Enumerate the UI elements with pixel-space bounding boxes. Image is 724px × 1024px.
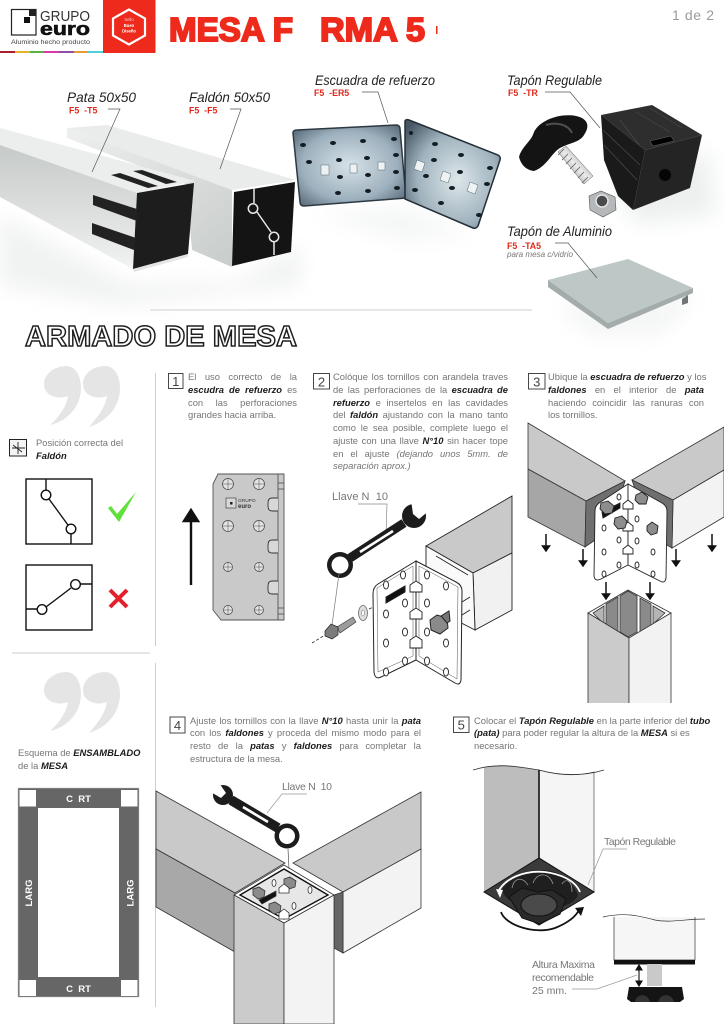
text: esquema de ensamblado xyxy=(18,747,140,771)
label: tapón regulable step 5: Tapón Regulable xyxy=(604,836,676,848)
product codes: F5 -TR xyxy=(508,88,538,98)
bracket plate: euro xyxy=(238,504,251,510)
product labels: Faldón 50x50 xyxy=(189,89,270,105)
product codes xyxy=(69,88,541,251)
logo: Grupo Euro: Aluminio hecho producto xyxy=(11,39,90,46)
illustration: bolt and washer xyxy=(312,574,410,648)
text: step 5: necesario. xyxy=(474,740,517,751)
badge: Sello Buen Diseño: Buen xyxy=(124,23,135,28)
arrow up xyxy=(184,510,198,585)
product soft shadows xyxy=(0,150,716,335)
dividers xyxy=(12,373,156,1007)
quote mark 2 xyxy=(44,672,120,733)
text: step 5 xyxy=(474,714,710,751)
icon: check mark xyxy=(108,492,136,522)
text: step 2: refuerzo e insertelos en las cavidades xyxy=(333,396,508,408)
product labels: Tapón Regulable xyxy=(507,72,602,88)
text: step 1 xyxy=(188,371,297,420)
text: step 4: Ajuste los tornillos con la llave N°10 hasta unir la pata xyxy=(190,714,421,726)
step 3 number xyxy=(528,374,545,390)
icon: faldón position xyxy=(10,440,26,456)
step 4 number xyxy=(170,717,185,733)
text: step 2: en el ajuste (dejando unos 5mm. de xyxy=(333,448,508,458)
step 5 number xyxy=(454,717,469,732)
label: tapón regulable step 5 xyxy=(588,836,676,885)
product codes: F5 -F5 xyxy=(189,106,217,116)
bracket plate: GRUPO xyxy=(238,498,256,504)
illustration: bracket step 2 xyxy=(373,561,462,684)
text: step 2: Colóque los tornillos con arandela traves xyxy=(333,371,508,382)
illustration: leveler height detail xyxy=(603,915,705,1002)
step 2 number xyxy=(314,374,330,390)
label: llave step 2: Llave N 10 xyxy=(332,491,388,503)
text: faldón position: Faldón xyxy=(36,450,67,461)
heading: armado de mesa: ARMADO DE MESA xyxy=(25,321,297,353)
product: Tapón de Aluminio xyxy=(548,259,693,329)
text: step 5: (pata) para poder regular la altura de la MESA si es xyxy=(474,727,690,738)
label: llave step 4: Llave N 10 xyxy=(282,781,332,793)
text: step 2: del faldón ajustando con la mano tanto xyxy=(333,409,508,420)
text: step 3: Ubique la escuadra de refuerzo y los xyxy=(548,371,706,382)
step 5 number: 5 xyxy=(458,718,465,732)
product labels: para mesa c/vidrio xyxy=(506,250,574,259)
product labels xyxy=(67,72,612,259)
text: esquema de ensamblado: Esquema de ENSAMBLADO xyxy=(18,747,140,758)
text: step 2: como le sea posible, complete luego el xyxy=(333,422,508,433)
step 1 number: 1 xyxy=(172,374,179,389)
diagram: table frame: LARG xyxy=(126,880,136,906)
label: altura máxima: recomendable xyxy=(532,972,594,984)
logo: Grupo Euro: GRUPO xyxy=(40,8,90,25)
badge: Sello Buen Diseño xyxy=(103,0,156,53)
label: altura máxima: Altura Maxima xyxy=(532,959,595,971)
diagram: correct position xyxy=(26,479,92,544)
illustration: bracket step 3 xyxy=(594,484,667,582)
product labels: Tapón de Aluminio xyxy=(507,223,612,239)
product codes: F5 -ER5 xyxy=(314,88,349,98)
product codes: F5 -T5 xyxy=(69,106,97,116)
text: step 2 xyxy=(333,371,508,471)
illustration: left tube step 3 xyxy=(528,423,625,547)
product labels: Escuadra de refuerzo xyxy=(315,72,435,88)
text: step 1: grandes hacia arriba. xyxy=(188,409,276,420)
illustration: right tube step 3 xyxy=(632,427,724,548)
text: step 3 xyxy=(548,371,706,420)
text: step 4: estructura de la mesa. xyxy=(190,753,283,764)
illustration: wrench step 4 xyxy=(209,780,300,869)
title: MESA F xyxy=(169,11,293,48)
label: altura máxima xyxy=(532,959,637,997)
text: step 4: con los faldones y proceda del mismo modo para el xyxy=(190,727,421,738)
text: step 1: con las perforaciones xyxy=(188,396,297,408)
label: llave step 2 xyxy=(332,491,388,535)
text: step 2: ajuste con una llave N°10 sin hacer tope xyxy=(333,435,508,446)
step 3 number: 3 xyxy=(533,374,540,390)
bracket plate xyxy=(213,474,284,620)
text: step 2: separación aprox.) xyxy=(333,460,411,471)
text: step 3: los tornillos. xyxy=(548,409,598,420)
step 4 number: 4 xyxy=(174,718,181,733)
divider xyxy=(150,309,532,311)
title xyxy=(169,11,438,48)
step 2 number: 2 xyxy=(318,374,325,390)
product: Faldón 50x50 xyxy=(67,125,296,267)
illustration: wrench step 2 xyxy=(327,500,431,578)
arrows down step 3 xyxy=(542,534,716,599)
text: step 5: Colocar el Tapón Regulable en la parte inferior del tubo xyxy=(474,714,710,726)
color strip xyxy=(0,51,103,53)
product labels: Pata 50x50 xyxy=(67,89,136,105)
diagram: incorrect position xyxy=(26,565,92,630)
illustration: assembled corner xyxy=(156,791,421,1024)
diagram: table frame: LARG xyxy=(24,880,35,906)
diagram: table frame: C RT xyxy=(66,794,91,805)
product codes: F5 -TA5 xyxy=(507,241,541,251)
text: step 1: El uso correcto de la xyxy=(188,371,297,382)
badge: Sello Buen Diseño: Diseño xyxy=(122,28,136,34)
icon: red cross xyxy=(110,590,127,607)
illustration: tube step 2 xyxy=(426,496,512,630)
product: Pata 50x50 xyxy=(0,128,195,272)
label: altura máxima: 25 mm. xyxy=(532,985,567,997)
illustration: post step 3 xyxy=(588,590,671,703)
product: Tapón Regulable xyxy=(519,105,702,217)
text: step 2: de las perforaciones de la escuadra de xyxy=(333,384,508,395)
text: step 3: faldones en el interior de pata xyxy=(548,384,704,395)
diagram: table frame: C RT xyxy=(66,984,91,995)
logo: Grupo Euro xyxy=(11,8,90,46)
product leader lines xyxy=(92,92,600,278)
badge: Sello Buen Diseño: Sello xyxy=(124,17,134,22)
illustration: leg with leveler xyxy=(473,765,604,930)
logo: Grupo Euro: euro xyxy=(40,19,90,39)
text: step 4 xyxy=(190,714,421,764)
title: RMA 5 xyxy=(320,11,425,48)
text: esquema de ensamblado: de la MESA xyxy=(18,760,68,771)
text: faldón position xyxy=(36,437,123,461)
quote mark 1 xyxy=(44,366,120,427)
product: Escuadra de refuerzo xyxy=(293,120,500,228)
diagram: table frame xyxy=(18,788,139,997)
label: llave step 4 xyxy=(267,781,332,813)
text: step 4: resto de la patas y faldones para completar la xyxy=(190,740,421,751)
page number: 1 de 2 xyxy=(672,7,714,23)
text: step 1: escudra de refuerzo es xyxy=(188,384,297,395)
text: faldón position: Posición correcta del xyxy=(36,437,123,448)
step 1 number xyxy=(168,374,183,389)
text: step 3: haciendo coincidir las ranuras con xyxy=(548,396,704,408)
